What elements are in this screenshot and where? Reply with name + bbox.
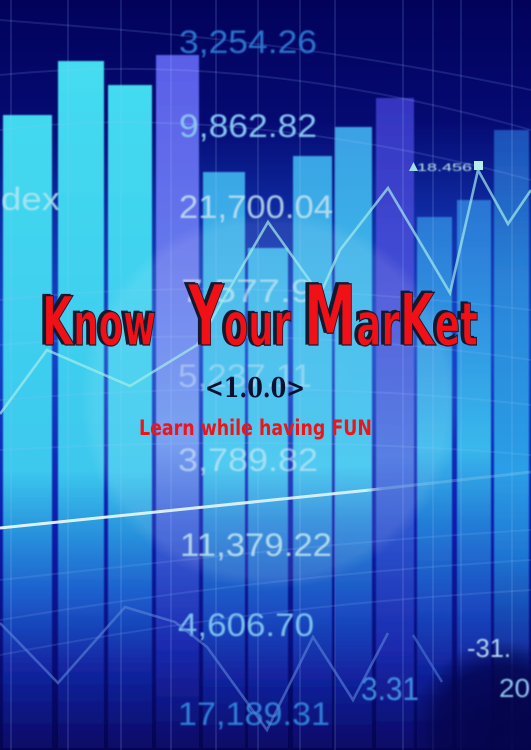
title [42,267,478,365]
numbers column: 3.31 [361,671,419,707]
numbers column: -31. [467,633,511,663]
title: Your [187,267,291,365]
numbers column: 17,189.31 [178,696,330,732]
numbers column: 18.456 [417,162,472,174]
icon: up triangle marker [409,162,418,171]
numbers column: 4,606.70 [178,607,314,643]
white trend line [0,472,531,528]
numbers column: 7,577.9 [181,273,313,309]
numbers column: 3,254.26 [179,24,317,60]
icon: data point marker [474,161,483,170]
title: Know [42,283,156,362]
dark bottom-right corner [410,640,531,750]
lower line chart fragment [413,635,442,682]
tagline: Learn while having FUN [139,416,372,440]
numbers column: 21,700.04 [179,189,333,225]
upper line chart [0,170,531,414]
title: MarKet [304,267,478,365]
central glow circle [80,210,460,590]
numbers column: 11,379.22 [180,527,332,563]
numbers column: 5,237.11 [178,358,312,394]
numbers column: dex [1,181,60,217]
lower line chart [0,607,388,730]
numbers column: 3,789.82 [178,442,318,478]
numbers column: 9,862.82 [179,108,317,144]
version number: <1.0.0> [205,373,305,404]
numbers column: 20 [499,673,530,703]
